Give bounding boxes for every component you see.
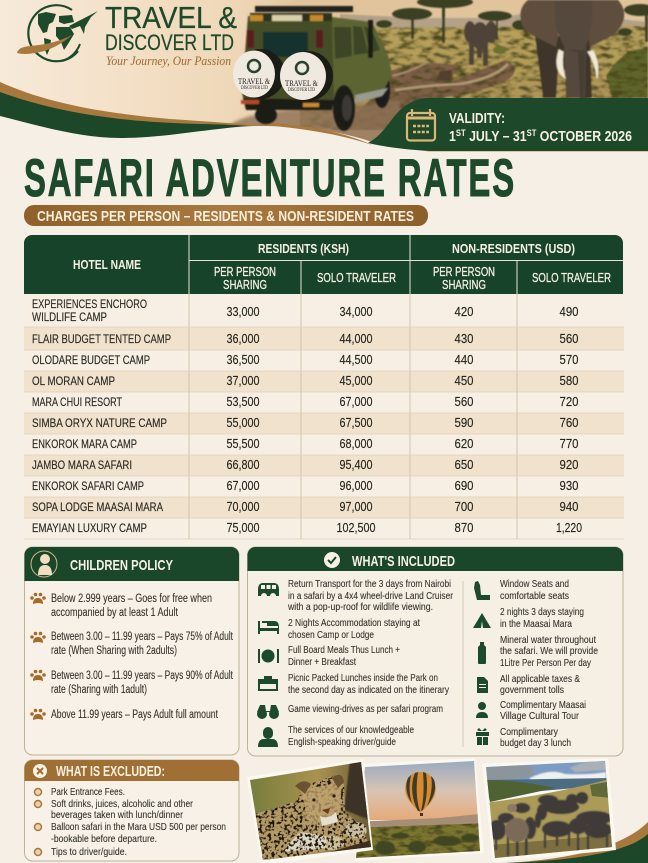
- icon: bottle: [478, 642, 486, 664]
- rates values: 44,500: [340, 352, 372, 367]
- hotel names: JAMBO MARA SAFARI: [32, 458, 132, 472]
- spare wheel right: DISCOVER LTD: [288, 88, 315, 93]
- rates values: [226, 304, 582, 535]
- included text right: Window Seats and: [500, 578, 569, 590]
- included text left: Dinner + Breakfast: [288, 656, 356, 668]
- included text left: with a pop-up-roof for wildlife viewing.: [287, 601, 433, 613]
- safari jeep: [233, 6, 392, 131]
- hotel names: WILDLIFE CAMP: [32, 310, 107, 324]
- rates values: 66,800: [226, 457, 260, 472]
- validity text: JULY – 31: [466, 129, 527, 145]
- rates values: 68,000: [340, 436, 372, 451]
- rates values: 95,400: [340, 457, 372, 472]
- included text right: comfortable seats: [500, 590, 569, 602]
- rates values: 102,500: [336, 520, 376, 535]
- exclusions text: [51, 786, 226, 858]
- company logo: [17, 0, 237, 68]
- included text right: 2 nights 3 days staying: [500, 606, 584, 618]
- hotel names: SIMBA ORYX NATURE CAMP: [32, 416, 167, 430]
- subtitle pill: [24, 205, 428, 226]
- included text left: English-speaking driver/guide: [288, 736, 396, 748]
- small elephant: [464, 21, 497, 66]
- rates values: 44,000: [340, 331, 372, 346]
- rates values: 96,000: [340, 478, 372, 493]
- rates values: 870: [454, 520, 474, 535]
- policy text: accompanied by at least 1 Adult: [51, 607, 179, 619]
- rates values: 67,000: [226, 478, 260, 493]
- green and gold wave: [0, 82, 648, 165]
- included text left: Full Board Meals Thus Lunch +: [288, 644, 400, 656]
- validity banner: [368, 98, 648, 151]
- rates values: 55,500: [226, 436, 260, 451]
- rates values: 33,000: [226, 304, 260, 319]
- icon: bed: [258, 621, 279, 634]
- hotel names: OLODARE BUDGET CAMP: [32, 353, 150, 367]
- spare wheel right: [280, 52, 326, 100]
- rates values: 700: [454, 499, 474, 514]
- rates values: 590: [454, 415, 474, 430]
- company name: TRAVEL &: [105, 0, 237, 35]
- icon: globe and plane: [17, 5, 98, 61]
- rates values: 650: [454, 457, 474, 472]
- policy text: Between 3.00 – 11.99 years – Pays 75% of Adult: [51, 631, 234, 643]
- exclusions text: -bookable before departure.: [51, 833, 157, 845]
- spare wheel left: TRAVEL &: [238, 77, 271, 86]
- hotel names: OL MORAN CAMP: [32, 374, 115, 388]
- subtitle pill: CHARGES PER PERSON – RESIDENTS & NON-RESIDENT RATES: [37, 209, 414, 225]
- icon: van: [258, 583, 279, 596]
- included text left: The services of our knowledgeable: [288, 724, 414, 736]
- hotel names: ENKOROK MARA CAMP: [32, 437, 137, 451]
- included text left: Return Transport for the 3 days from Nairobi: [288, 578, 451, 590]
- table header: SOLO TRAVELER: [532, 271, 611, 285]
- policy text: Above 11.99 years – Pays Adult full amount: [51, 709, 219, 721]
- rates values: 36,500: [226, 352, 260, 367]
- icon: check: [324, 552, 340, 568]
- table header: PER PERSON: [214, 265, 276, 279]
- spare wheel left: [233, 50, 275, 98]
- included text right: [500, 578, 598, 749]
- bottom corner wave: [505, 822, 648, 863]
- icon: calendar: [407, 109, 435, 140]
- included text left: 2 Nights Accommodation staying at: [288, 617, 420, 629]
- included text left: [287, 578, 453, 748]
- rates values: 430: [454, 331, 474, 346]
- hotel names: FLAIR BUDGET TENTED CAMP: [32, 332, 171, 346]
- rates values: 620: [454, 436, 474, 451]
- icon: maasai person: [476, 702, 488, 718]
- rates values: 53,500: [226, 394, 260, 409]
- balloon: [405, 772, 436, 816]
- policy text: rate (When Sharing with 2adults): [51, 645, 177, 657]
- panel: children policy: [24, 547, 239, 755]
- icon: document: [477, 677, 488, 693]
- validity text: VALIDITY:: [449, 111, 505, 127]
- rates values: 920: [560, 457, 578, 472]
- table header: PER PERSON: [433, 265, 495, 279]
- tagline: Your Journey, Our Passion: [106, 54, 231, 68]
- included text left: the second day as indicated on the itinerary: [288, 684, 450, 696]
- icon: tent: [473, 613, 491, 628]
- rates values: 67,000: [340, 394, 372, 409]
- icon: child: [31, 551, 57, 577]
- table header: NON-RESIDENTS (USD): [452, 241, 575, 256]
- rates values: 37,000: [226, 373, 260, 388]
- hotel names: EXPERIENCES ENCHORO: [32, 297, 147, 311]
- table header: SOLO TRAVELER: [317, 271, 396, 285]
- panel: what is excluded: [24, 760, 239, 861]
- road: [330, 60, 515, 130]
- table header: [24, 235, 623, 294]
- rates values: 760: [560, 415, 578, 430]
- exclusions text: Park Entrance Fees.: [51, 786, 125, 798]
- photo: balloon over savanna: [355, 758, 484, 861]
- hotel names: SOPA LODGE MAASAI MARA: [32, 500, 163, 514]
- included text left: chosen Camp or Lodge: [288, 629, 374, 641]
- exclusions text: Soft drinks, juices, alcoholic and other: [51, 798, 193, 810]
- exclusions text: Balloon safari in the Mara USD 500 per person: [51, 821, 226, 833]
- policy text: Below 2.999 years – Goes for free when: [51, 593, 212, 605]
- exclusions text: beverages taken with lunch/dinner: [51, 809, 183, 821]
- icon: binoculars: [257, 705, 279, 719]
- spare wheel left: DISCOVER LTD: [241, 86, 268, 91]
- rates values: 420: [454, 304, 474, 319]
- rates values: 70,000: [226, 499, 260, 514]
- hotel names: [32, 297, 171, 535]
- included text left: Game viewing-drives as per safari program: [288, 703, 443, 715]
- validity text: ST: [456, 128, 466, 138]
- included text right: the safari. We will provide: [500, 645, 598, 657]
- rates values: 1,220: [556, 520, 582, 535]
- photo: wildebeest herd: [480, 755, 616, 862]
- rates values: 690: [454, 478, 474, 493]
- trees: [376, 0, 648, 43]
- policy text: Between 3.00 – 11.99 years – Pays 90% of Adult: [51, 670, 234, 682]
- validity text: 1: [449, 129, 457, 145]
- rates values: 440: [454, 352, 474, 367]
- included text right: government tolls: [500, 684, 564, 696]
- rates values: 67,500: [340, 415, 372, 430]
- exclusions text: Tips to driver/guide.: [51, 846, 127, 858]
- body with rosettes: [252, 775, 368, 863]
- table header: HOTEL NAME: [73, 257, 141, 272]
- icon: paw prints: [30, 593, 46, 720]
- heading: CHILDREN POLICY: [70, 557, 173, 574]
- rates values: 97,000: [340, 499, 372, 514]
- big elephant: [520, 0, 624, 98]
- icon: seat: [474, 581, 490, 600]
- included text right: All applicable taxes &: [500, 673, 580, 685]
- hotel names: MARA CHUI RESORT: [32, 395, 123, 409]
- spare wheel right: TRAVEL &: [285, 79, 319, 88]
- hotel names: ENKOROK SAFARI CAMP: [32, 479, 144, 493]
- header safari photo scene: [0, 0, 648, 152]
- included text left: Picnic Packed Lunches inside the Park on: [288, 672, 438, 684]
- rates values: 34,000: [340, 304, 372, 319]
- rates values: 940: [560, 499, 578, 514]
- rates table: [24, 235, 624, 539]
- included text right: budget day 3 lunch: [500, 737, 571, 749]
- validity text: OCTOBER 2026: [536, 129, 632, 145]
- validity text: ST: [527, 128, 537, 138]
- rates values: 75,000: [226, 520, 260, 535]
- icon: x mark: [33, 764, 47, 778]
- rates values: 36,000: [226, 331, 260, 346]
- rates values: 560: [560, 331, 578, 346]
- policy text: rate (Sharing with 1adult): [51, 684, 147, 696]
- heading: WHAT IS EXCLUDED:: [56, 764, 165, 780]
- rates values: 720: [560, 394, 578, 409]
- rates values: 45,000: [340, 373, 372, 388]
- validity text: [449, 111, 632, 145]
- included text right: Complimentary Maasai: [500, 699, 586, 711]
- included text right: Complimentary: [500, 726, 559, 738]
- included text left: in a safari by a 4x4 wheel-drive Land Cruiser: [288, 590, 453, 602]
- included text right: in the Maasai Mara: [500, 618, 572, 630]
- rates values: 450: [454, 373, 474, 388]
- icon: cooler: [258, 676, 278, 691]
- table header: RESIDENTS (KSH): [258, 241, 349, 256]
- table header: SHARING: [223, 278, 267, 292]
- included text right: Mineral water throughout: [500, 634, 596, 646]
- rates values: 560: [454, 394, 474, 409]
- hotel names: EMAYIAN LUXURY CAMP: [32, 521, 147, 535]
- icon: driver: [258, 727, 278, 747]
- included text right: Village Cultural Tour: [500, 710, 579, 722]
- rates values: 55,000: [226, 415, 260, 430]
- photo: leopard: [247, 759, 373, 863]
- rates values: 570: [560, 352, 578, 367]
- icon: gift: [476, 728, 489, 745]
- heading: WHAT'S INCLUDED: [352, 553, 455, 570]
- icon: plate: [258, 649, 279, 663]
- rates values: 490: [560, 304, 578, 319]
- rates values: 930: [560, 478, 578, 493]
- company name second line: DISCOVER LTD: [105, 30, 234, 55]
- table header: SHARING: [442, 278, 486, 292]
- table rows background: [24, 294, 624, 539]
- included text right: 1Litre Per Person Per day: [500, 657, 592, 669]
- rates values: 770: [560, 436, 578, 451]
- rates values: 580: [560, 373, 578, 388]
- policy text: [51, 593, 234, 721]
- panel: what's included: [248, 547, 623, 756]
- bullets: [34, 788, 42, 856]
